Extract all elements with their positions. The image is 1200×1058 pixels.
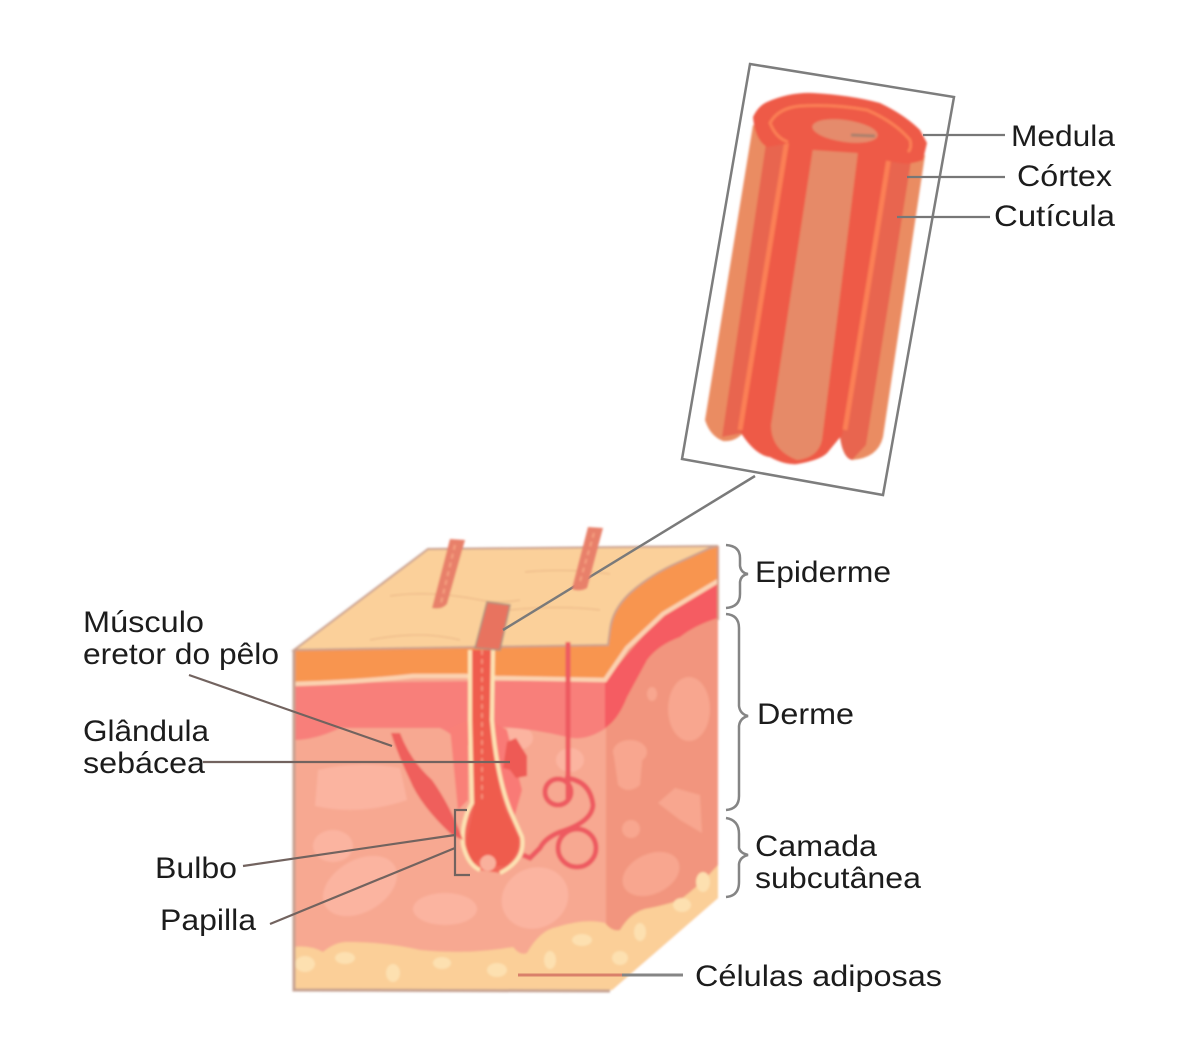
label: Epiderme: Epiderme bbox=[755, 556, 891, 589]
magnified frame bbox=[682, 64, 954, 495]
label: Bulbo: Bulbo bbox=[155, 852, 237, 885]
label: Papilla: Papilla bbox=[160, 904, 256, 937]
block outline bbox=[294, 650, 610, 991]
label: Medula: Medula bbox=[1011, 120, 1115, 153]
line: córtex bbox=[907, 176, 1005, 178]
panel: hair shaft enlargement bbox=[682, 64, 954, 495]
sebaceous gland bbox=[503, 738, 527, 778]
bracket: camada subcutânea bbox=[726, 818, 748, 897]
line: glândula sebácea bbox=[203, 761, 510, 763]
line: bulbo bbox=[243, 835, 455, 866]
orange epidermis layer bbox=[294, 546, 718, 683]
label: Músculo eretor do pêlo bbox=[83, 606, 279, 671]
label: Músculo eretor do pêlo: Músculo bbox=[83, 606, 204, 639]
bracket: epiderme bbox=[726, 545, 748, 608]
cylinder top bbox=[753, 93, 927, 164]
line: células adiposas outer bbox=[622, 974, 683, 976]
erector muscle bbox=[391, 733, 463, 840]
label: Glândula sebácea bbox=[83, 715, 209, 780]
label: Glândula sebácea: sebácea bbox=[83, 747, 205, 780]
block artwork bbox=[294, 539, 718, 991]
label: Camada subcutânea bbox=[755, 830, 921, 895]
hair on surface left bbox=[432, 539, 465, 608]
red dermal layer, right bbox=[605, 580, 718, 728]
hair at the surface bbox=[475, 602, 510, 650]
dermis patches bbox=[312, 677, 710, 940]
label: Derme: Derme bbox=[757, 698, 854, 731]
callout lines bbox=[189, 135, 1005, 975]
line: células adiposas bbox=[518, 974, 622, 976]
pale basal line bbox=[294, 581, 718, 684]
skin block bbox=[294, 539, 718, 991]
front face bbox=[294, 650, 606, 990]
label: Glândula sebácea: Glândula bbox=[83, 715, 209, 748]
hair cylinder bbox=[705, 93, 927, 464]
label: Cutícula: Cutícula bbox=[994, 200, 1115, 233]
bracket: derme bbox=[726, 614, 748, 810]
label: Camada subcutânea: Camada bbox=[755, 830, 877, 863]
line: papilla bbox=[270, 848, 455, 924]
top surface bbox=[294, 546, 718, 650]
label: Músculo eretor do pêlo: eretor do pêlo bbox=[83, 638, 279, 671]
hair follicle bbox=[450, 650, 523, 873]
connector from skin to enlargement bbox=[503, 476, 755, 630]
line: cutícula bbox=[897, 216, 990, 218]
surface creases bbox=[370, 570, 610, 640]
hair on surface right bbox=[572, 527, 603, 590]
line: músculo eretor bbox=[189, 675, 392, 746]
fat cell layer bbox=[294, 865, 718, 990]
right face bbox=[605, 546, 718, 990]
sweat gland bbox=[523, 642, 596, 867]
red dermal layer, front bbox=[294, 680, 606, 747]
label: Camada subcutânea: subcutânea bbox=[755, 862, 921, 895]
label: Células adiposas: Células adiposas bbox=[695, 960, 942, 993]
line: medula bbox=[923, 134, 1005, 136]
papilla bracket bbox=[455, 810, 470, 875]
label: Córtex: Córtex bbox=[1017, 160, 1112, 193]
